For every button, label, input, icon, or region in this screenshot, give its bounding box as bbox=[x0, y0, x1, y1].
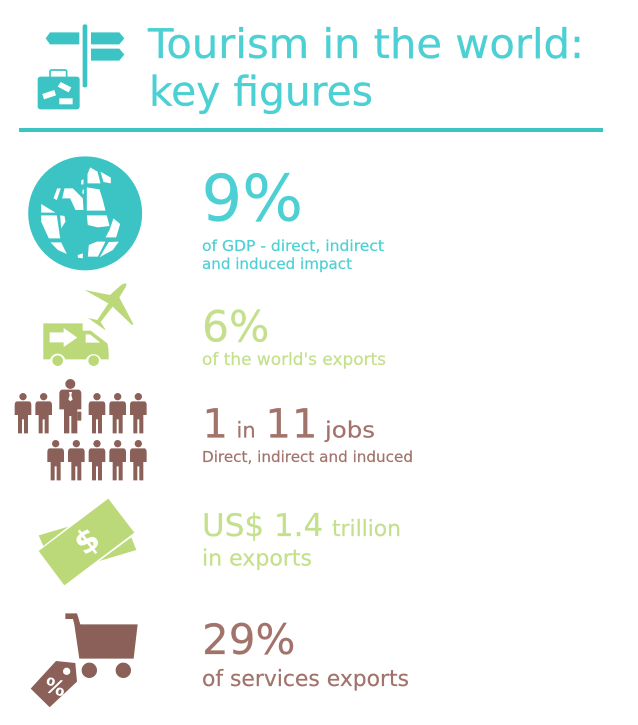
icon: banknotes: $ bbox=[66, 519, 107, 563]
1 in 11 jobs stat: in bbox=[236, 418, 256, 442]
6% stat: of the world's exports bbox=[202, 350, 386, 369]
icon: shopping cart with percent tag bbox=[31, 613, 138, 707]
title: key figures bbox=[149, 68, 373, 116]
6% stat: 6% bbox=[202, 304, 269, 352]
9% stat: and induced impact bbox=[202, 255, 352, 273]
US$ 1.4 trillion stat: trillion bbox=[332, 517, 401, 542]
9% stat: of GDP - direct, indirect bbox=[202, 237, 384, 255]
icon: signpost and suitcase bbox=[38, 24, 124, 109]
icon: businessman bbox=[59, 379, 81, 433]
US$ 1.4 trillion stat bbox=[202, 508, 401, 572]
icon: banknotes bbox=[39, 499, 136, 585]
6% stat bbox=[202, 304, 386, 369]
1 in 11 jobs stat: 11 bbox=[266, 402, 318, 448]
icon: plane and delivery van bbox=[43, 283, 133, 366]
29% stat: 29% bbox=[202, 615, 295, 664]
29% stat: of services exports bbox=[202, 667, 409, 692]
1 in 11 jobs stat: 1 bbox=[202, 402, 228, 448]
header rule bbox=[19, 128, 603, 132]
1 in 11 jobs stat bbox=[202, 402, 413, 466]
icon: shopping cart with percent tag: % bbox=[42, 673, 69, 702]
title: Tourism in the world: bbox=[147, 20, 584, 68]
1 in 11 jobs stat: Direct, indirect and induced bbox=[202, 448, 413, 466]
29% stat bbox=[202, 615, 409, 692]
9% stat bbox=[202, 162, 384, 273]
1 in 11 jobs stat: jobs bbox=[324, 418, 375, 444]
US$ 1.4 trillion stat: in exports bbox=[202, 546, 312, 572]
title bbox=[147, 20, 584, 116]
icon: group of eleven people bbox=[15, 379, 147, 480]
icon: globe bbox=[28, 156, 142, 270]
US$ 1.4 trillion stat: US$ 1.4 bbox=[202, 508, 323, 544]
9% stat: 9% bbox=[202, 162, 303, 236]
